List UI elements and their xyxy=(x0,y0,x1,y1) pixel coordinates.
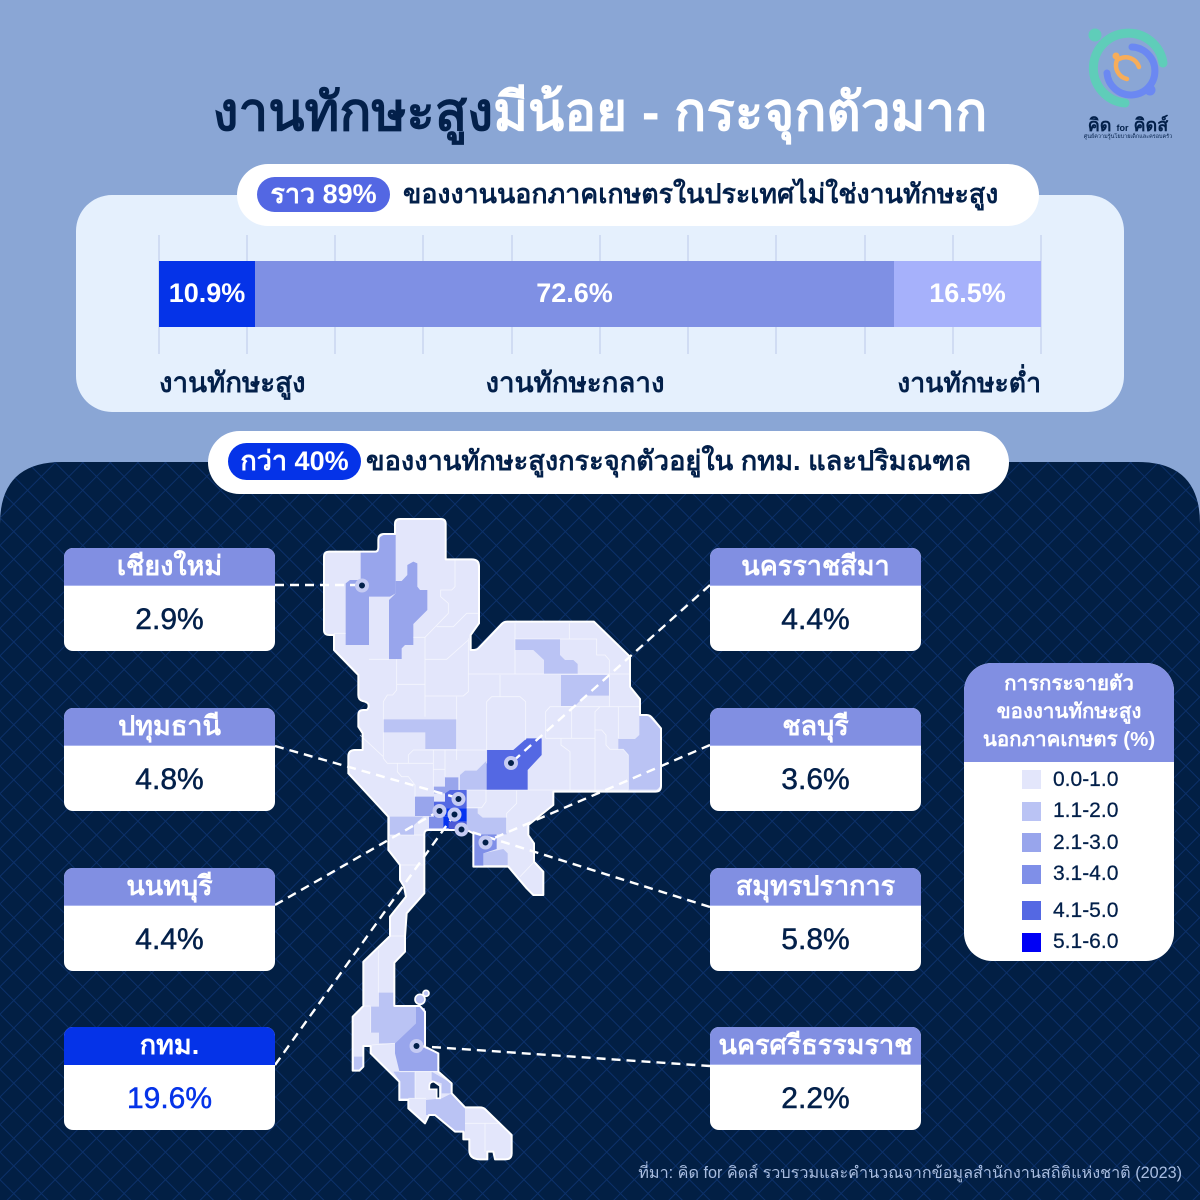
card: เชียงใหม่: เชียงใหม่ xyxy=(117,551,222,581)
bar: low skill xyxy=(894,261,1041,327)
card: นนทบุรี: นนทบุรี xyxy=(126,871,213,901)
legend heading: การกระจายตัว xyxy=(1004,672,1134,695)
legend heading: ของงานทักษะสูง xyxy=(997,700,1141,723)
legend heading xyxy=(964,663,1174,762)
badge: ราว 89% xyxy=(257,177,390,212)
legend: 3.1-4.0 xyxy=(1053,862,1118,885)
card: ปทุมธานี: 4.8% xyxy=(135,763,204,796)
region: Nakhon Ratchasima xyxy=(487,738,542,790)
heading pill: 89% xyxy=(237,164,1039,226)
logo: คิด for คิดส์ xyxy=(1084,28,1172,140)
badge: กว่า 40% xyxy=(228,443,361,480)
card: นครราชสีมา xyxy=(710,548,921,651)
card: สมุทรปราการ xyxy=(710,868,921,971)
card: ชลบุรี xyxy=(710,708,921,811)
bar: high skill: 10.9% xyxy=(169,278,245,308)
legend: 2.1-3.0 xyxy=(1053,831,1118,854)
bar: mid skill: 72.6% xyxy=(536,278,613,308)
logo: คิด for คิดส์: ศูนย์ความรู้นโยบายเด็กและครอบครัว xyxy=(1084,134,1172,140)
legend: 5.1-6.0 xyxy=(1053,930,1118,953)
legend heading: นอกภาคเกษตร (%) xyxy=(983,728,1155,751)
card: เชียงใหม่: 2.9% xyxy=(135,603,204,636)
card: นครศรีธรรมราช: นครศรีธรรมราช xyxy=(719,1030,912,1060)
card: นครราชสีมา: 4.4% xyxy=(781,603,850,636)
dark lower panel with lattice pattern xyxy=(0,462,1200,1200)
bar: low skill: 16.5% xyxy=(929,278,1006,308)
card: ชลบุรี: ชลบุรี xyxy=(782,711,849,741)
bar: mid skill xyxy=(255,261,894,327)
card: กทม. xyxy=(64,1027,275,1130)
statement text: ของงานทักษะสูงกระจุกตัวอยู่ใน กทม. และปริมณฑล xyxy=(366,445,971,476)
card: เชียงใหม่ xyxy=(64,548,275,651)
statement text: ของงานนอกภาคเกษตรในประเทศไม่ใช่งานทักษะสูง xyxy=(403,179,998,209)
card: นครศรีธรรมราช xyxy=(710,1027,921,1130)
map of Thailand xyxy=(323,518,662,1160)
card: ปทุมธานี: ปทุมธานี xyxy=(118,711,221,741)
south of Thailand regions xyxy=(354,936,498,1152)
legend xyxy=(964,663,1174,961)
card: ปทุมธานี xyxy=(64,708,275,811)
card: กทม.: 19.6% xyxy=(127,1082,212,1115)
map markers xyxy=(357,580,516,1051)
legend: 4.1-5.0 xyxy=(1053,899,1118,922)
title: งานทักษะสูงมีน้อย - กระจุกตัวมาก xyxy=(213,83,987,142)
label: mid skill: งานทักษะกลาง xyxy=(486,367,664,398)
logo: คิด for คิดส์: คิด for คิดส์ xyxy=(1088,115,1168,135)
dashed leader lines xyxy=(275,578,710,1068)
bar: high skill xyxy=(159,261,255,327)
card: ชลบุรี: 3.6% xyxy=(781,763,850,796)
label: low skill: งานทักษะต่ำ xyxy=(897,368,1041,398)
label: high skill: งานทักษะสูง xyxy=(159,367,306,398)
heading pill: 40% xyxy=(208,431,1009,494)
card: สมุทรปราการ: สมุทรปราการ xyxy=(736,871,895,901)
card: กทม.: กทม. xyxy=(140,1030,199,1060)
card: นครศรีธรรมราช: 2.2% xyxy=(781,1082,850,1115)
legend: 0.0-1.0 xyxy=(1053,768,1118,791)
card: นนทบุรี: 4.4% xyxy=(135,923,204,956)
legend: 1.1-2.0 xyxy=(1053,799,1118,822)
source note: ที่มา: คิด for คิดส์ รวบรวมและคำนวณจากข้อมูลสำนักงานสถิติแห่งชาติ (2023) xyxy=(638,1164,1182,1182)
panel: skill share of non-agricultural jobs xyxy=(76,195,1124,412)
card: นครราชสีมา: นครราชสีมา xyxy=(741,551,890,581)
card: นนทบุรี xyxy=(64,868,275,971)
badge: ราว 89%: ราว 89% xyxy=(270,179,377,209)
badge: กว่า 40%: กว่า 40% xyxy=(240,446,349,476)
card: สมุทรปราการ: 5.8% xyxy=(781,923,850,956)
